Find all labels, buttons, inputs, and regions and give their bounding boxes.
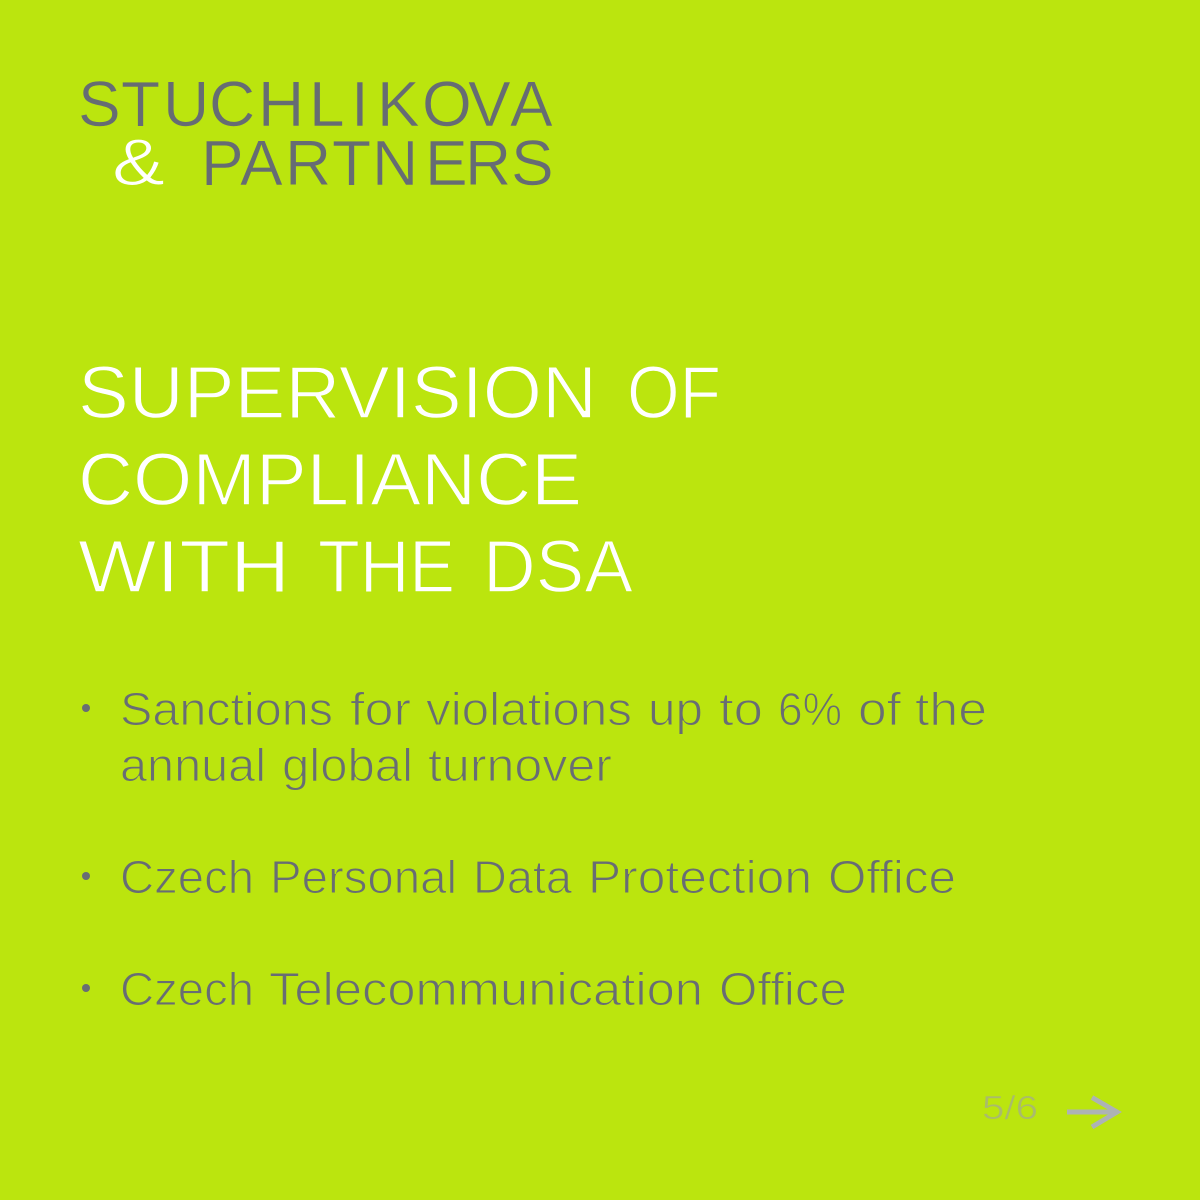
bullet: sanctions: to (719, 683, 763, 735)
page number: 5/6 (982, 1089, 1038, 1126)
bullet: sanctions: global (282, 739, 413, 791)
bullet: sanctions: turnover (428, 739, 612, 791)
heading (78, 351, 721, 608)
bullet: sanctions: violations (426, 683, 632, 735)
logo: Stuchlikova & Partners (78, 68, 554, 199)
heading: WITH (78, 525, 290, 608)
logo text: Stuchlikova: STUCHLIKOVA (78, 68, 553, 140)
bullet: sanctions: annual (120, 739, 266, 791)
bullet: sanctions: Sanctions (120, 683, 333, 735)
logo ampersand: & (112, 125, 165, 199)
bullet: telecommunication office: Telecommunication (269, 963, 703, 1015)
heading: THE (318, 525, 455, 608)
heading: DSA (483, 525, 634, 608)
heading: SUPERVISION (78, 351, 597, 434)
bullet: data protection office: Czech (120, 851, 254, 903)
bullet: sanctions: for (350, 683, 411, 735)
bullet: data protection office: Personal (270, 851, 457, 903)
logo text: Partners: PARTNERS (201, 127, 554, 199)
bullet: sanctions: of (858, 683, 901, 735)
bullet: sanctions: 6% (778, 683, 842, 735)
heading: OF (627, 351, 721, 434)
bullet: telecommunication office (82, 963, 847, 1015)
bullet: data protection office: Data (473, 851, 572, 903)
bullet: data protection office: Protection (588, 851, 812, 903)
bullet: data protection office (82, 851, 956, 903)
bullet: sanctions: the (915, 683, 987, 735)
bullet: sanctions (82, 683, 987, 791)
bullet: telecommunication office: Office (719, 963, 847, 1015)
bullet: sanctions: up (648, 683, 703, 735)
bullet list (82, 683, 987, 1015)
icon: next arrow (1067, 1098, 1118, 1127)
bullet: telecommunication office: Czech (120, 963, 254, 1015)
heading: COMPLIANCE (78, 438, 582, 521)
bullet: data protection office: Office (828, 851, 956, 903)
